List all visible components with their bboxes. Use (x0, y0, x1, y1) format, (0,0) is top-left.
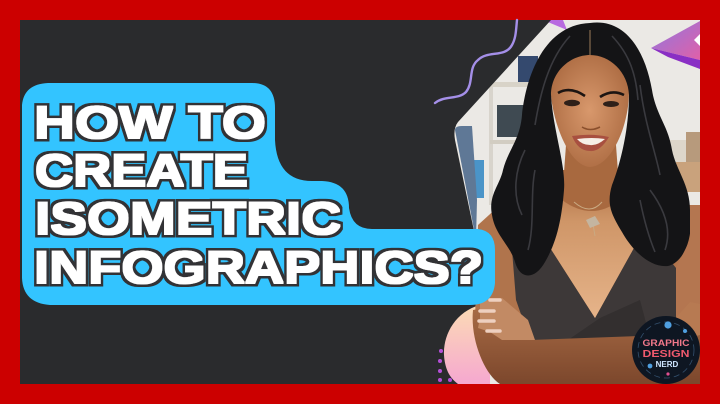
room background (440, 20, 700, 384)
right hand (672, 302, 700, 340)
hair (491, 22, 691, 276)
logo badge: GRAPHIC (642, 338, 690, 349)
lips (572, 135, 609, 151)
nose (582, 127, 600, 130)
title text: HOW TO (34, 97, 266, 148)
shoulders (475, 205, 700, 340)
hair part (589, 30, 591, 55)
title text: ISOMETRIC (35, 193, 341, 244)
blue monitor (455, 126, 477, 240)
peach sphere (444, 305, 490, 384)
right shoulder (676, 205, 700, 316)
face (550, 54, 629, 167)
logo badge: DESIGN (642, 348, 690, 360)
purple dots (438, 349, 452, 382)
title text: CREATE (35, 145, 248, 196)
title text: INFOGRAPHICS? (34, 242, 483, 293)
wrap fold (568, 300, 650, 340)
hair highlights (516, 36, 668, 252)
neck (562, 145, 620, 211)
eyes (564, 100, 580, 106)
fingers (479, 300, 500, 331)
title text (34, 97, 483, 293)
blue title blob (22, 83, 495, 305)
dark background panel (20, 20, 551, 384)
logo badge: NERD (656, 360, 679, 369)
purple isometric prism (543, 20, 700, 69)
teeth (577, 138, 605, 145)
eyebrows (558, 90, 585, 96)
left hand (478, 298, 535, 340)
necklace (574, 202, 602, 236)
chest (540, 170, 645, 318)
woman portrait (473, 22, 700, 384)
crossed arms (473, 305, 700, 384)
dark top (512, 228, 676, 340)
squiggle line (435, 20, 517, 103)
logo badge (632, 316, 700, 384)
